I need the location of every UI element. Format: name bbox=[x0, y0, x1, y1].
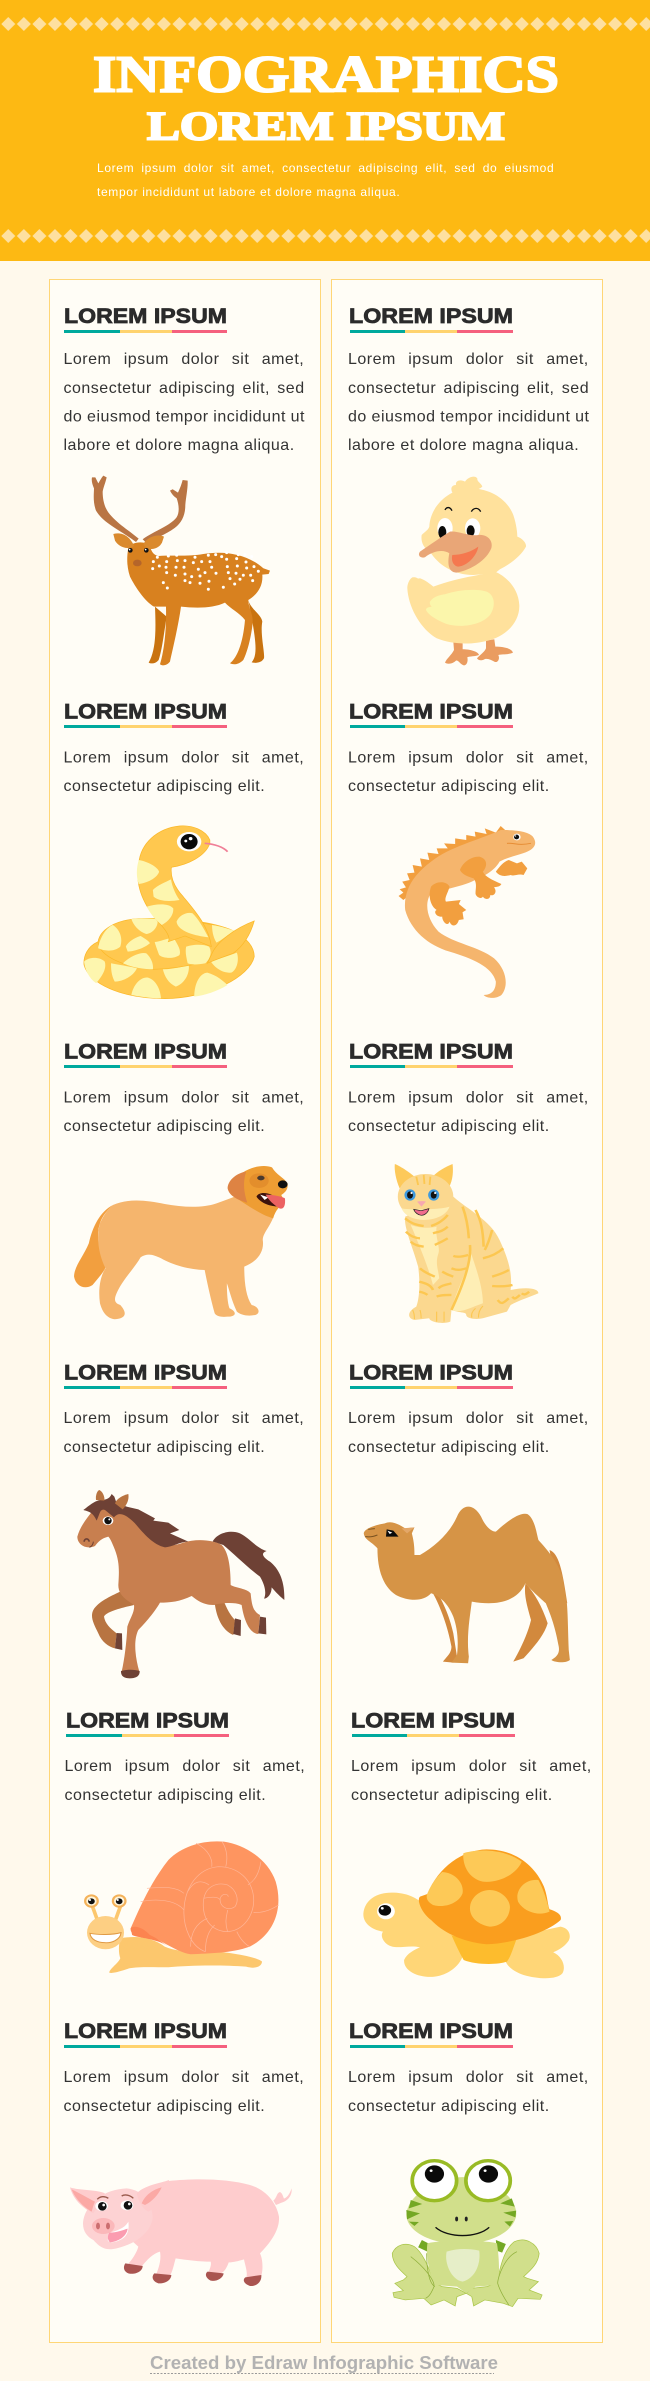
body text bbox=[64, 2069, 304, 2115]
cat paws bbox=[413, 1306, 483, 1322]
camel body bbox=[364, 1507, 570, 1663]
body text: Lorem ipsum dolor sit amet, bbox=[351, 1758, 592, 1775]
frog right leg bbox=[466, 2240, 542, 2307]
turtle eye bbox=[377, 1903, 395, 1919]
heading underline bbox=[66, 1734, 229, 1737]
body text: Lorem ipsum dolor sit amet, bbox=[348, 1410, 589, 1427]
body text bbox=[348, 749, 589, 795]
snake upper coil bbox=[98, 918, 235, 969]
body text: consectetur adipiscing elit. bbox=[64, 2098, 265, 2115]
section: frog bbox=[348, 2020, 589, 2307]
body text bbox=[64, 1089, 304, 1135]
horse tail bbox=[213, 1532, 284, 1600]
body text: Lorem ipsum dolor sit amet, bbox=[64, 2069, 304, 2086]
body text: consectetur adipiscing elit. bbox=[64, 1439, 265, 1456]
body text bbox=[64, 749, 304, 795]
body text bbox=[64, 1410, 304, 1456]
duck wing bbox=[426, 590, 494, 626]
lizard face bbox=[507, 834, 531, 844]
turtle shell spots bbox=[427, 1850, 550, 1927]
body text bbox=[348, 2069, 589, 2115]
horse ears bbox=[96, 1490, 129, 1509]
body text: consectetur adipiscing elit. bbox=[64, 1787, 266, 1804]
turtle head and flippers bbox=[363, 1893, 463, 1977]
snail eye stalks bbox=[84, 1894, 127, 1920]
heading underline bbox=[350, 1386, 513, 1389]
section: turtle bbox=[351, 1709, 592, 1978]
snake neck and head bbox=[138, 826, 211, 947]
body text: Lorem ipsum dolor sit amet, bbox=[64, 351, 304, 368]
header banner bbox=[0, 0, 650, 261]
body text: consectetur adipiscing elit. bbox=[351, 1787, 553, 1804]
heading underline bbox=[350, 1065, 513, 1068]
icon: duck bbox=[407, 477, 526, 665]
body text bbox=[348, 1410, 589, 1456]
heading: LOREM IPSUM bbox=[64, 1040, 227, 1063]
header intro text: tempor incididunt ut labore et dolore magna aliqua. bbox=[97, 185, 400, 199]
body text: labore et dolore magna aliqua. bbox=[348, 437, 579, 454]
duck feet bbox=[445, 639, 513, 665]
camel far legs bbox=[433, 1550, 567, 1663]
cat stripes bbox=[405, 1207, 529, 1310]
duck tuft bbox=[451, 477, 482, 493]
section: dog bbox=[64, 1040, 304, 1319]
body text: consectetur adipiscing elit. bbox=[348, 1118, 550, 1135]
body text bbox=[348, 1089, 589, 1135]
heading underline bbox=[64, 1386, 227, 1389]
pig ears bbox=[70, 2180, 169, 2213]
body text: Lorem ipsum dolor sit amet, bbox=[64, 1758, 305, 1775]
deer eyes and nose bbox=[128, 548, 149, 566]
body text: consectetur adipiscing elit. bbox=[64, 1118, 265, 1135]
body text: consectetur adipiscing elit. bbox=[348, 778, 550, 795]
body text: consectetur adipiscing elit. bbox=[348, 2098, 550, 2115]
heading: LOREM IPSUM bbox=[64, 700, 227, 723]
heading underline bbox=[64, 1065, 227, 1068]
cat forehead stripes bbox=[416, 1175, 430, 1185]
body text: consectetur adipiscing elit. bbox=[348, 1439, 550, 1456]
snake eye and tongue bbox=[177, 832, 228, 852]
cat chest bbox=[411, 1225, 483, 1311]
icon: cat bbox=[395, 1164, 538, 1323]
heading: LOREM IPSUM bbox=[64, 2020, 227, 2043]
heading underline bbox=[350, 2045, 513, 2048]
pig face bbox=[92, 2195, 133, 2242]
duck head bbox=[421, 488, 526, 575]
section: cat bbox=[348, 1040, 589, 1323]
heading underline bbox=[350, 330, 513, 333]
heading: LOREM IPSUM bbox=[349, 2020, 513, 2043]
heading underline bbox=[350, 725, 513, 728]
body text: Lorem ipsum dolor sit amet, bbox=[348, 2069, 589, 2086]
body text: do eiusmod tempor incididunt ut bbox=[64, 409, 305, 426]
pig body bbox=[120, 2179, 279, 2281]
heading underline bbox=[64, 2045, 227, 2048]
section: snail bbox=[64, 1709, 305, 1973]
snake lower coil bbox=[84, 918, 254, 999]
frog cheek stripes bbox=[406, 2198, 516, 2227]
horse hooves bbox=[115, 1617, 266, 1678]
cat head bbox=[398, 1174, 453, 1219]
body text: do eiusmod tempor incididunt ut bbox=[348, 409, 590, 426]
icon: frog bbox=[392, 2161, 542, 2307]
body text bbox=[348, 351, 590, 454]
heading: LOREM IPSUM bbox=[64, 1361, 227, 1384]
icon: snake bbox=[84, 826, 254, 999]
icon: horse bbox=[77, 1490, 284, 1678]
header intro text bbox=[97, 161, 554, 199]
snake tail bbox=[207, 921, 254, 963]
frog eyes bbox=[412, 2161, 510, 2201]
pig head bbox=[83, 2188, 153, 2249]
lizard crest bbox=[399, 826, 507, 900]
snail body bbox=[109, 1937, 262, 1973]
heading: LOREM IPSUM bbox=[349, 1361, 513, 1384]
frog left leg bbox=[392, 2244, 466, 2306]
heading: LOREM IPSUM bbox=[349, 700, 513, 723]
duck body bbox=[407, 572, 519, 644]
frog shoulders bbox=[418, 2240, 506, 2253]
snail head bbox=[87, 1916, 124, 1949]
frog torso bbox=[427, 2241, 499, 2293]
horse face details bbox=[84, 1516, 113, 1547]
cat face bbox=[404, 1189, 439, 1215]
heading underline bbox=[352, 1734, 515, 1737]
frog belly bbox=[446, 2249, 480, 2282]
section: camel bbox=[348, 1361, 589, 1663]
body text: Lorem ipsum dolor sit amet, bbox=[64, 1410, 304, 1427]
turtle shell bbox=[419, 1849, 561, 1944]
frog leg lines bbox=[411, 2252, 517, 2305]
heading: LOREM IPSUM bbox=[349, 305, 513, 328]
duck beak bbox=[419, 532, 492, 573]
camel face details bbox=[365, 1527, 414, 1537]
body text: Lorem ipsum dolor sit amet, bbox=[64, 1089, 304, 1106]
left panel frame bbox=[50, 280, 320, 2342]
body text bbox=[64, 351, 305, 454]
header intro text: Lorem ipsum dolor sit amet, consectetur adipiscing elit, sed do eiusmod bbox=[97, 161, 554, 175]
snail shell bbox=[131, 1841, 278, 1954]
icon: lizard bbox=[399, 826, 535, 998]
turtle belly bbox=[451, 1935, 516, 1964]
panel: left column bbox=[50, 280, 320, 2342]
lizard body bbox=[405, 830, 535, 998]
bottom diamond band bbox=[0, 229, 650, 243]
icon: snail bbox=[84, 1841, 279, 1973]
section: snake bbox=[64, 700, 304, 999]
heading: LOREM IPSUM bbox=[349, 1040, 513, 1063]
icon: dog bbox=[74, 1166, 288, 1319]
subtitle: LOREM IPSUM bbox=[147, 104, 505, 148]
body text: consectetur adipiscing elit, sed bbox=[348, 380, 589, 397]
pig hooves bbox=[124, 2263, 261, 2286]
deer spots bbox=[153, 553, 258, 589]
section: deer bbox=[64, 305, 305, 665]
right panel frame bbox=[332, 280, 602, 2342]
heading: LOREM IPSUM bbox=[64, 305, 227, 328]
frog mouth and nostrils bbox=[436, 2217, 489, 2236]
icon: pig bbox=[70, 2179, 292, 2286]
icon: camel bbox=[364, 1507, 570, 1663]
duck eyes bbox=[437, 508, 481, 539]
section: horse bbox=[64, 1361, 304, 1678]
title: INFOGRAPHICS bbox=[93, 46, 559, 104]
body text: consectetur adipiscing elit, sed bbox=[64, 380, 305, 397]
heading underline bbox=[64, 725, 227, 728]
body text: consectetur adipiscing elit. bbox=[64, 778, 265, 795]
section: lizard bbox=[348, 700, 589, 998]
heading: LOREM IPSUM bbox=[351, 1709, 515, 1732]
body text: Lorem ipsum dolor sit amet, bbox=[348, 749, 589, 766]
cat ears bbox=[395, 1164, 453, 1188]
body text bbox=[351, 1758, 592, 1804]
body text: Lorem ipsum dolor sit amet, bbox=[348, 1089, 589, 1106]
body text bbox=[64, 1758, 305, 1804]
top diamond band bbox=[0, 17, 650, 31]
section: duck bbox=[348, 305, 590, 665]
snail shell spiral bbox=[141, 1842, 279, 1952]
dog face details bbox=[256, 1176, 288, 1209]
body text: labore et dolore magna aliqua. bbox=[64, 437, 295, 454]
icon: turtle bbox=[363, 1849, 570, 1978]
dog head bbox=[231, 1166, 288, 1218]
footer credit: Created by Edraw Infographic Software bbox=[150, 2353, 498, 2373]
heading underline bbox=[64, 330, 227, 333]
panel: right column bbox=[332, 280, 602, 2342]
body text: Lorem ipsum dolor sit amet, bbox=[64, 749, 304, 766]
body text: Lorem ipsum dolor sit amet, bbox=[348, 351, 589, 368]
horse far legs bbox=[92, 1592, 134, 1648]
section: pig bbox=[64, 2020, 304, 2286]
lizard legs and patches bbox=[430, 857, 527, 925]
icon: deer bbox=[92, 476, 270, 665]
horse mane bbox=[83, 1494, 188, 1547]
snail mouth bbox=[90, 1933, 121, 1943]
duck mouth bbox=[452, 547, 478, 567]
frog head bbox=[406, 2177, 516, 2244]
cat body bbox=[405, 1197, 538, 1323]
horse body bbox=[77, 1502, 260, 1672]
heading: LOREM IPSUM bbox=[66, 1709, 229, 1732]
